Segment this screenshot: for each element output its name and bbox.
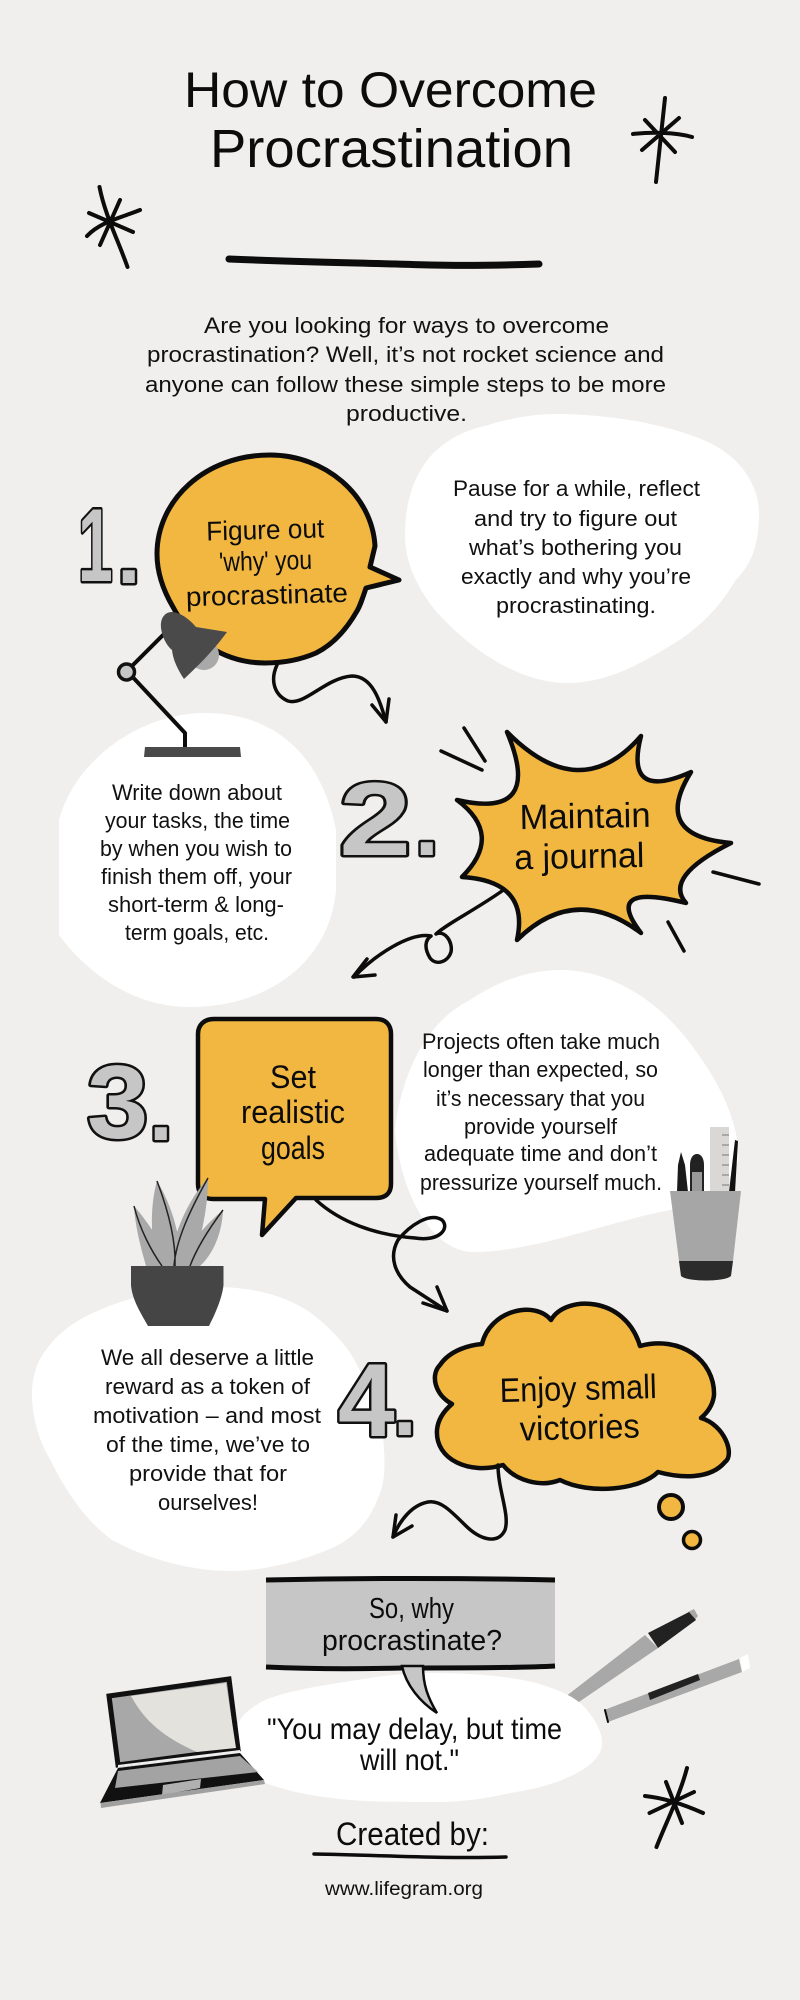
panel: step 3 description: it’s necessary that you xyxy=(436,1086,645,1111)
credit heading: Created by: xyxy=(336,1816,489,1852)
panel: step 4 description: provide that for xyxy=(129,1461,287,1486)
number 4: 4 xyxy=(338,1342,395,1458)
panel: step 1 description: procrastinating. xyxy=(496,593,656,618)
icon: pen cup xyxy=(670,1127,741,1280)
speech bubble: step 3: goals xyxy=(261,1130,325,1166)
number 1: . xyxy=(117,507,141,602)
panel: step 3 description: adequate time and don’t xyxy=(424,1141,657,1166)
icon: desk lamp xyxy=(118,612,241,757)
speech bubble: step 3 xyxy=(198,1019,391,1235)
thought bubble: step 4: victories xyxy=(519,1407,640,1449)
number 3: . xyxy=(149,1064,173,1159)
thought bubble: step 4: Enjoy small xyxy=(499,1368,657,1410)
panel: step 4 description xyxy=(32,1287,385,1571)
icon: two pens xyxy=(565,1609,750,1722)
number 1: 1 xyxy=(78,488,113,604)
icon: burst rays xyxy=(441,728,759,951)
panel: step 2 description: finish them off, your xyxy=(101,864,292,889)
banner: so why procrastinate: procrastinate? xyxy=(322,1625,502,1657)
icon: potted plant xyxy=(131,1178,224,1326)
speech bubble: step 3: realistic xyxy=(241,1094,345,1130)
icon: star top right xyxy=(633,98,692,182)
panel: step 2 description: short-term & long- xyxy=(108,892,284,917)
panel: step 4 description: reward as a token of xyxy=(105,1374,311,1399)
number 1 xyxy=(78,488,141,604)
icon: star top left xyxy=(87,187,140,267)
arrow: step 2 to step 3 xyxy=(353,891,502,977)
speech bubble: step 3: Set xyxy=(270,1059,316,1095)
number 3: 3 xyxy=(87,1044,148,1160)
website text: www.lifegram.org xyxy=(324,1879,483,1900)
number 4: . xyxy=(393,1359,417,1454)
arrow: step 1 to step 2 xyxy=(274,665,389,722)
title: How to Overcome xyxy=(184,62,597,118)
panel: step 3 description: pressurize yourself much. xyxy=(420,1170,662,1195)
intro text: Are you looking for ways to overcome xyxy=(204,313,609,338)
panel: step 3 description xyxy=(395,970,738,1252)
number 2: 2 xyxy=(339,760,411,877)
panel: step 4 description: ourselves! xyxy=(158,1490,258,1515)
panel: step 4 description: motivation – and most xyxy=(93,1403,321,1428)
quote text: "You may delay, but time xyxy=(267,1713,562,1746)
thought bubble: step 4 xyxy=(435,1304,729,1548)
intro text: procrastination? Well, it’s not rocket science and xyxy=(147,342,664,367)
title underline xyxy=(229,259,539,265)
panel: step 1 description: exactly and why you’re xyxy=(461,564,691,589)
panel: step 1 description: and try to figure out xyxy=(474,506,677,531)
panel: step 1 description: Pause for a while, reflect xyxy=(453,476,700,501)
panel: step 2 description: by when you wish to xyxy=(100,836,292,861)
icon: laptop xyxy=(100,1679,265,1808)
title: Procrastination xyxy=(210,119,573,179)
panel: quote blob xyxy=(235,1673,602,1802)
panel: step 3 description: Projects often take much xyxy=(422,1029,660,1054)
panel: step 4 description: We all deserve a little xyxy=(101,1345,314,1370)
quote text xyxy=(267,1713,562,1777)
speech burst: step 2: a journal xyxy=(514,836,645,877)
panel: step 2 description: Write down about xyxy=(112,780,282,805)
banner: so why procrastinate xyxy=(266,1578,555,1713)
intro text xyxy=(145,313,666,426)
speech bubble: step 1: 'why' you xyxy=(219,545,312,577)
panel: step 1 description: what’s bothering you xyxy=(468,535,682,560)
intro text: anyone can follow these simple steps to be more xyxy=(145,372,666,397)
quote text: will not." xyxy=(359,1744,459,1777)
speech bubble: step 1: Figure out xyxy=(206,513,325,547)
intro text: productive. xyxy=(346,401,467,426)
panel: step 2 description: term goals, etc. xyxy=(125,920,269,945)
title xyxy=(184,62,597,179)
arrow: step 4 to closing xyxy=(393,1465,506,1539)
icon: star bottom right xyxy=(645,1768,703,1847)
speech bubble: step 1 xyxy=(157,455,399,663)
banner: so why procrastinate: So, why xyxy=(369,1593,454,1625)
panel: step 2 description: your tasks, the time xyxy=(105,808,290,833)
number 2: . xyxy=(415,779,439,874)
speech burst: step 2 xyxy=(457,732,731,940)
speech burst: step 2: Maintain xyxy=(519,796,651,837)
panel: step 3 description: longer than expected, so xyxy=(423,1057,658,1082)
panel: step 2 description xyxy=(59,713,336,1007)
panel: step 4 description: of the time, we’ve to xyxy=(106,1432,310,1457)
arrow: step 3 to step 4 xyxy=(316,1200,447,1311)
panel: step 3 description: provide yourself xyxy=(464,1114,618,1139)
speech bubble: step 1: procrastinate xyxy=(186,578,348,612)
panel: step 1 description xyxy=(405,414,759,683)
